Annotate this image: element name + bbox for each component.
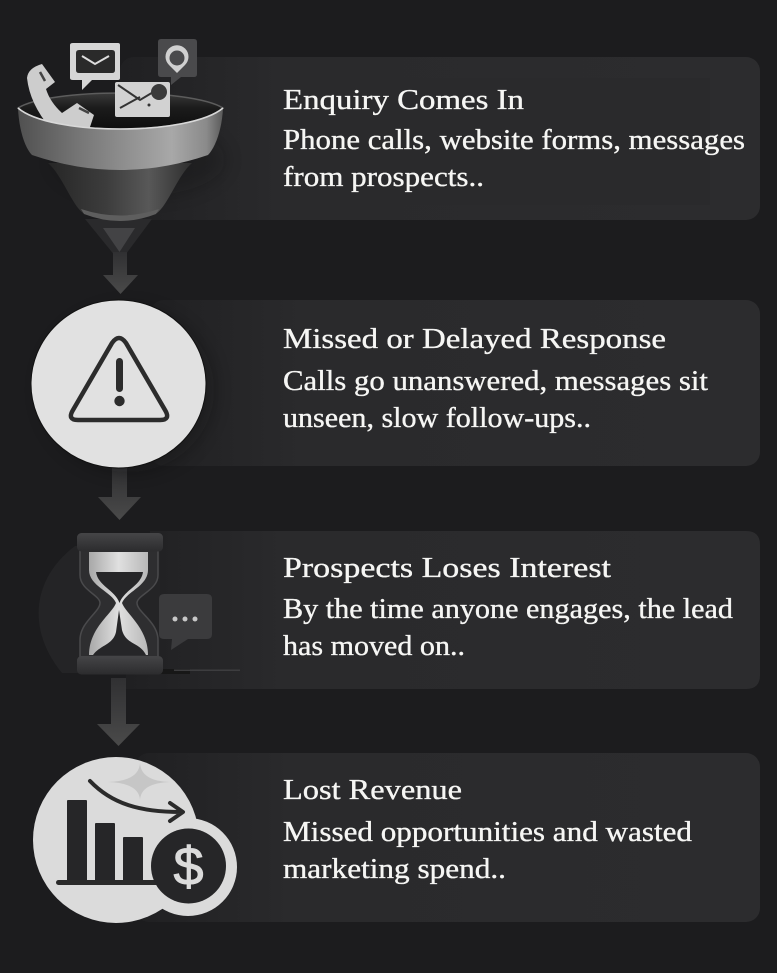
text block <box>283 125 745 193</box>
text block: Calls go unanswered, messages sit <box>283 366 708 397</box>
text block: By the time anyone engages, the lead <box>283 594 733 625</box>
text block: Phone calls, website forms, messages <box>283 125 745 156</box>
icon: message bubble <box>70 43 120 90</box>
panel: missed or delayed response <box>31 300 760 520</box>
text block: has moved on.. <box>283 631 465 662</box>
heading: Lost Revenue <box>283 774 462 806</box>
panel: lost revenue <box>33 753 760 923</box>
icon: falling revenue chart <box>33 757 237 923</box>
text block: unseen, slow follow-ups.. <box>283 403 591 434</box>
icon: typing bubble <box>159 594 212 650</box>
arrow: funnel to missed response <box>85 219 152 294</box>
icon: phone handset <box>27 64 94 130</box>
ground line <box>174 670 240 671</box>
dollar coin <box>151 828 226 904</box>
panel: enquiry comes in <box>18 39 760 294</box>
heading: Missed or Delayed Response <box>283 323 666 355</box>
funnel opening <box>18 93 223 129</box>
panel: prospects loses interest <box>39 531 760 746</box>
coin ring <box>139 818 237 916</box>
sparkle <box>108 763 170 800</box>
text block: Missed opportunities and wasted <box>283 817 692 848</box>
text block <box>283 366 708 434</box>
icon: funnel with incoming messages <box>18 39 225 294</box>
heading: Prospects Loses Interest <box>283 552 611 584</box>
dollar coin: $ <box>173 837 204 897</box>
icon: location bubble <box>158 39 197 85</box>
trend arrow <box>90 781 183 821</box>
text block <box>283 817 692 885</box>
arrow: response to interest <box>98 468 141 520</box>
icon: envelope <box>115 82 170 117</box>
funnel rim <box>18 108 223 170</box>
funnel shadow <box>55 124 225 196</box>
heading: Enquiry Comes In <box>283 84 525 116</box>
funnel cone <box>48 163 192 220</box>
bars <box>67 800 143 881</box>
icon: hourglass <box>77 533 163 674</box>
text block: marketing spend.. <box>283 854 506 885</box>
arrow: interest to revenue <box>97 678 140 746</box>
shadow under hourglass <box>160 669 190 674</box>
backdrop circle <box>39 546 160 673</box>
text block <box>283 594 733 662</box>
icon: warning in circle <box>31 300 214 472</box>
funnel spout lip <box>81 209 159 221</box>
text block: from prospects.. <box>283 162 484 193</box>
